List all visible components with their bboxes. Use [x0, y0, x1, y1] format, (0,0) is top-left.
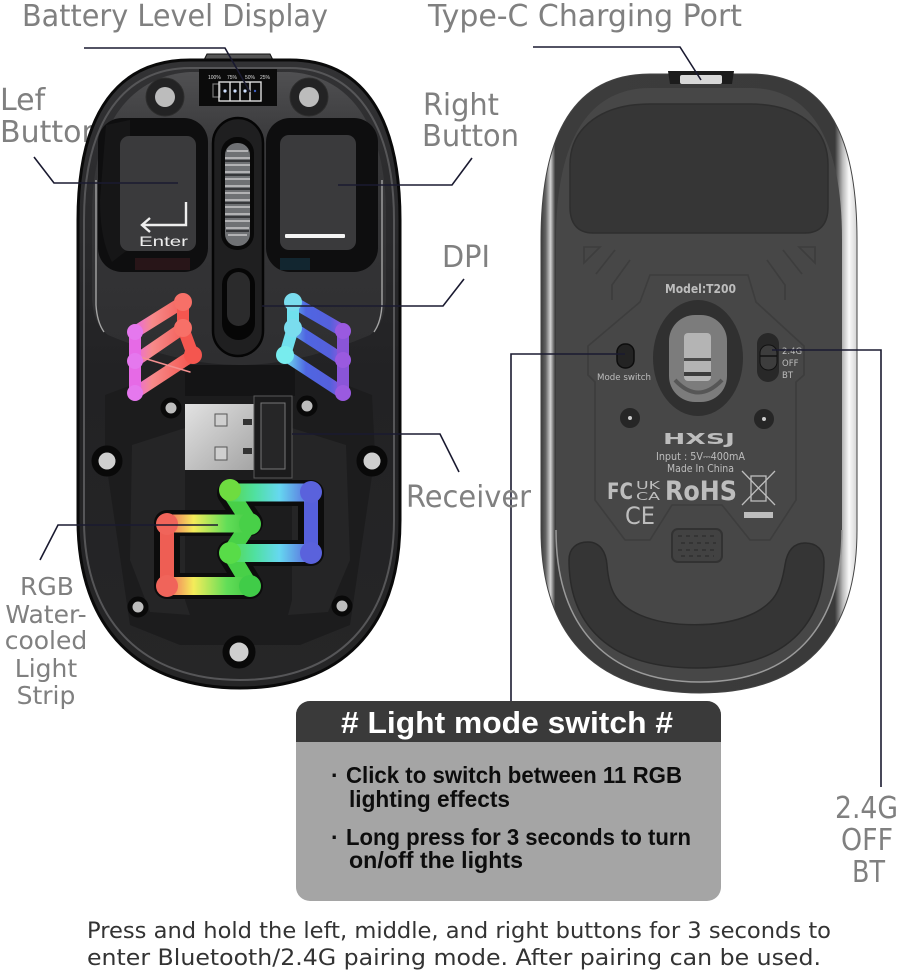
battery display: 100% — [208, 75, 221, 81]
certification marks: RoHS — [665, 476, 737, 507]
mouse: top view — [78, 54, 400, 688]
footer note: Press and hold the left, middle, and right buttons for 3 seconds to — [87, 919, 831, 944]
bottom shell — [541, 74, 857, 693]
certification marks: FC — [607, 480, 633, 505]
label: RGB Water-cooled Light Strip: cooled — [5, 626, 87, 655]
label: RGB Water-cooled Light Strip — [5, 572, 87, 710]
slide switch — [757, 333, 802, 382]
callout text 2: Long press for 3 seconds to turn — [346, 824, 691, 850]
label: DPI: DPI — [442, 240, 490, 275]
certification marks: UK — [636, 479, 661, 492]
left button — [98, 118, 208, 272]
scroll channel — [213, 118, 263, 356]
mode switch button — [597, 344, 651, 383]
RGB strip: upper left — [127, 293, 202, 401]
mode switch button: Mode switch — [597, 373, 651, 383]
model label: Model:T200 — [665, 281, 736, 296]
bottom body face — [556, 88, 842, 682]
certification marks — [607, 471, 775, 530]
made in china: Made In China — [667, 463, 734, 475]
label: Receiver: Receiver — [406, 480, 532, 515]
slide switch: BT — [782, 371, 794, 381]
callout text 2: · — [331, 824, 339, 850]
label: Right Button — [422, 88, 519, 154]
RGB strip: upper right — [276, 293, 351, 401]
label: RGB Water-cooled Light Strip: Water- — [5, 600, 87, 629]
small screws — [130, 398, 350, 615]
callout text 2: on/off the lights — [349, 847, 523, 873]
mouse top tab — [203, 54, 274, 62]
vent grille — [672, 529, 722, 562]
right button — [266, 118, 378, 272]
label: Battery Level Display: Battery Level Display — [22, 0, 328, 34]
bottom view screws — [624, 412, 770, 425]
slide switch: 2.4G — [782, 347, 802, 357]
battery display: 50% — [245, 75, 256, 81]
embossed plate lines — [584, 247, 815, 540]
left button: Enter — [139, 233, 188, 249]
footer note: enter Bluetooth/2.4G pairing mode. After pairing can be used. — [87, 946, 821, 971]
certification marks: CE — [625, 502, 655, 530]
callout header — [296, 701, 721, 742]
callout: light mode switch — [296, 701, 721, 901]
label: RGB Water-cooled Light Strip: Strip — [17, 681, 75, 710]
battery display — [199, 69, 277, 106]
translucent cap — [92, 72, 386, 365]
label: Left Button: Lef — [0, 83, 47, 118]
USB receiver — [185, 396, 292, 478]
top glide pad — [570, 104, 828, 233]
RGB water-cooled light strip — [156, 479, 322, 597]
label: Type-C Charging Port: Type-C Charging Port — [427, 0, 742, 34]
label: 2.4G OFF BT: OFF — [841, 823, 893, 858]
label: Left Button — [0, 83, 100, 150]
callout text 1: lighting effects — [349, 786, 510, 812]
label: Left Button: Button — [0, 115, 100, 150]
battery display: 25% — [260, 75, 271, 81]
leader lines — [34, 47, 881, 787]
battery display: 75% — [227, 75, 238, 81]
callout heading: # Light mode switch # — [341, 705, 673, 740]
input text: Input : 5V⎓400mA — [656, 451, 746, 463]
label: 2.4G OFF BT — [835, 791, 898, 890]
label: RGB Water-cooled Light Strip: RGB — [20, 572, 74, 601]
footer note — [87, 919, 831, 971]
scroll wheel — [221, 137, 254, 250]
label: Right Button: Button — [422, 119, 519, 154]
callout text 1: Click to switch between 11 RGB — [346, 762, 682, 788]
mouse: bottom view — [541, 71, 857, 693]
large screw posts — [95, 449, 384, 665]
sensor ring — [653, 300, 743, 416]
callout text 1 — [331, 762, 682, 812]
type-c port — [668, 71, 734, 84]
label: RGB Water-cooled Light Strip: Light — [15, 654, 77, 683]
mouse shell — [78, 60, 400, 688]
certification marks: CA — [636, 490, 661, 503]
bottom glide pad — [569, 542, 824, 668]
label: 2.4G OFF BT: BT — [852, 855, 886, 890]
internal plate — [105, 365, 375, 645]
callout text 1: · — [331, 762, 339, 788]
HXSJ logo: HXSJ — [663, 430, 735, 448]
label: Right Button: Right — [423, 88, 499, 123]
callout text 2 — [331, 824, 691, 873]
DPI button — [222, 268, 255, 340]
slide switch: OFF — [782, 359, 799, 369]
callout body — [296, 701, 721, 901]
screw posts top — [146, 78, 328, 116]
